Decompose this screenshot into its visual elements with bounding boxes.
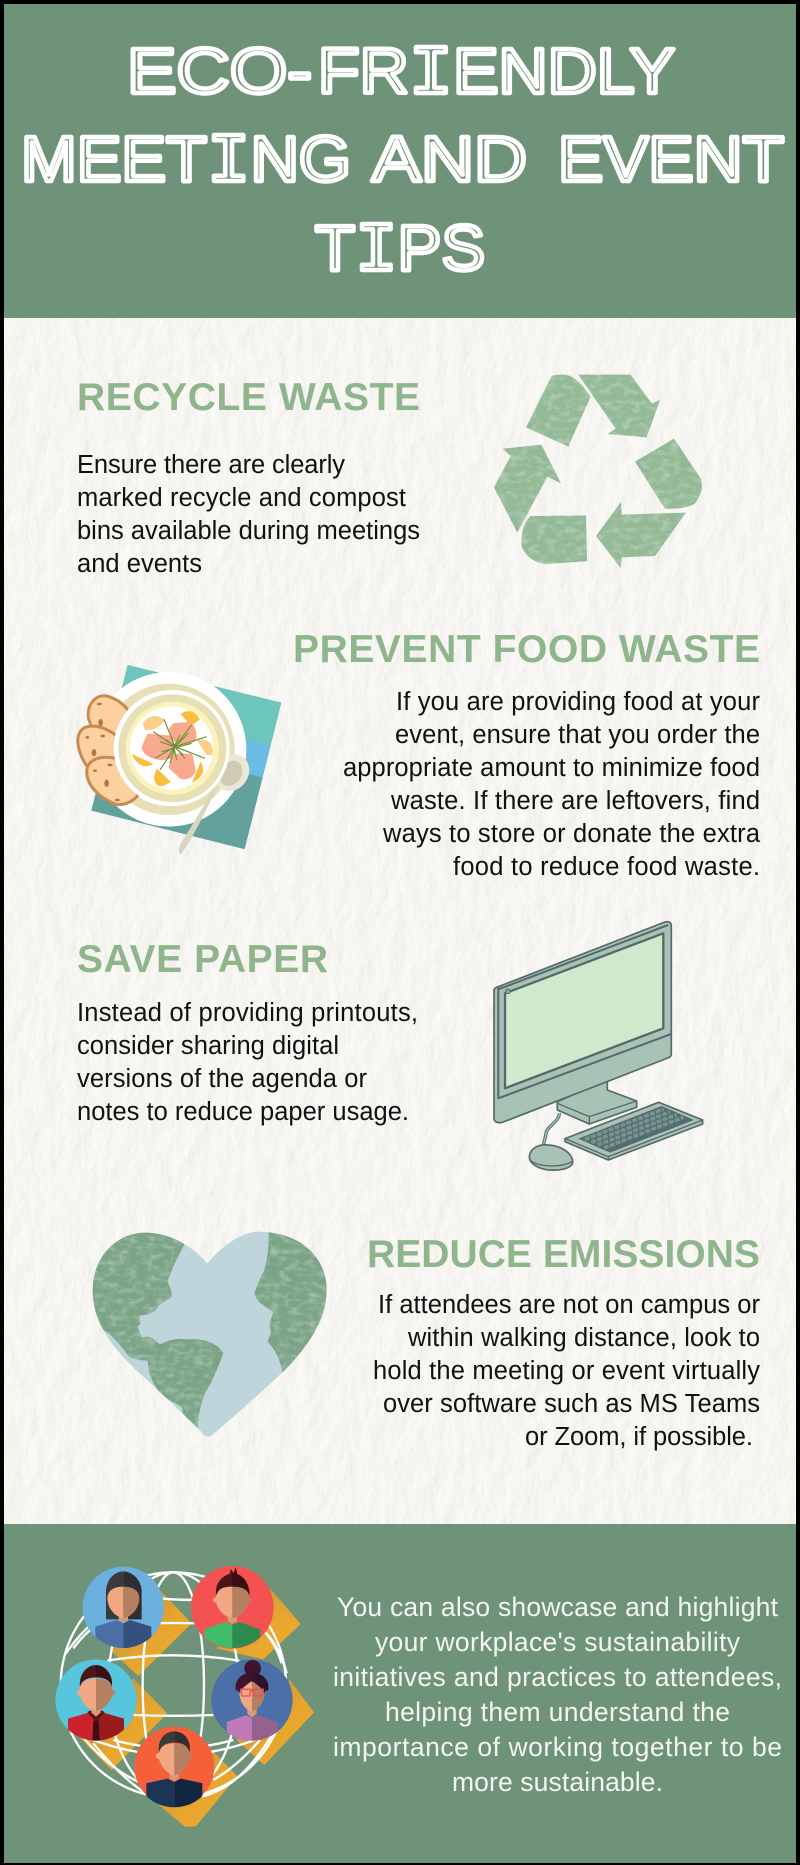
text: save paper body: consider sharing digital (77, 1032, 339, 1060)
person: woman with long hair (83, 1567, 164, 1649)
text: prevent food waste body: event, ensure that you order the (395, 721, 760, 749)
text: recycle waste body: Ensure there are clearly (77, 451, 345, 479)
title: FRIENDLY (318, 35, 675, 114)
text: recycle waste body: marked recycle and compost (77, 484, 406, 512)
text: prevent food waste body (343, 688, 761, 881)
panel: footer banner (4, 1524, 796, 1863)
text: reduce emissions body: hold the meeting or event virtually (373, 1357, 760, 1385)
person: man with tie (55, 1659, 137, 1742)
text: reduce emissions body: If attendees are not on campus or (378, 1291, 760, 1319)
text: save paper body: Instead of providing printouts, (77, 999, 418, 1027)
text: recycle waste body (77, 451, 420, 578)
text: reduce emissions body (373, 1291, 760, 1451)
title: EVENT (558, 123, 784, 195)
text: footer message: importance of working together to be (333, 1732, 782, 1762)
icon: recycling symbol (494, 375, 702, 568)
text: prevent food waste body: If you are providing food at your (396, 688, 760, 716)
text: footer message (333, 1592, 782, 1797)
text: prevent food waste body: appropriate amount to minimize food (343, 754, 760, 782)
text: prevent food waste body: ways to store or donate the extra (382, 820, 761, 848)
panel: save paper (77, 922, 703, 1170)
text: save paper body: versions of the agenda or (77, 1065, 368, 1093)
title: ECO- (127, 35, 312, 107)
icon: earth heart (92, 1232, 327, 1437)
heading: reduce emissions: REDUCE EMISSIONS (367, 1233, 760, 1276)
title (21, 35, 784, 291)
panel: prevent food waste (60, 628, 761, 881)
panel: paper background (4, 318, 796, 1524)
text: prevent food waste body: waste. If there are leftovers, find (390, 787, 760, 815)
text: save paper body (77, 999, 418, 1126)
person: man with spiky hair (191, 1566, 274, 1649)
panel: reduce emissions (83, 1223, 760, 1451)
panel: recycle waste (77, 375, 702, 578)
text: prevent food waste body: food to reduce food waste. (453, 853, 760, 881)
text: footer message: your workplace's sustainability (375, 1627, 741, 1657)
icon: desktop computer (494, 922, 703, 1170)
text: reduce emissions body: over software such as MS Teams (383, 1390, 760, 1418)
text: recycle waste body: and events (77, 550, 202, 578)
heading: prevent food waste: PREVENT FOOD WASTE (293, 628, 760, 671)
panel: header banner (4, 4, 796, 318)
icon: global team (55, 1566, 314, 1827)
wireframe globe (61, 1572, 287, 1798)
text: footer message: more sustainable. (452, 1767, 663, 1797)
heading: save paper: SAVE PAPER (77, 938, 328, 981)
text: footer message: initiatives and practices to attendees, (333, 1662, 782, 1692)
text: footer message: You can also showcase and highlight (337, 1592, 779, 1622)
text: reduce emissions body: or Zoom, if possible. (525, 1423, 753, 1451)
heading: recycle waste: RECYCLE WASTE (77, 376, 420, 419)
text: reduce emissions body: within walking distance, look to (407, 1324, 760, 1352)
text: save paper body: notes to reduce paper usage. (77, 1098, 409, 1126)
text: recycle waste body: bins available during meetings (77, 517, 420, 545)
orange long shadows (80, 1588, 314, 1827)
title: MEETING (21, 123, 351, 202)
icon: soup bowl on napkin (76, 665, 282, 855)
person: man in navy shirt (134, 1727, 214, 1808)
text: footer message: helping them understand the (385, 1697, 730, 1727)
person: woman with glasses (211, 1659, 293, 1742)
title: AND (372, 123, 527, 195)
title: TIPS (315, 212, 485, 291)
